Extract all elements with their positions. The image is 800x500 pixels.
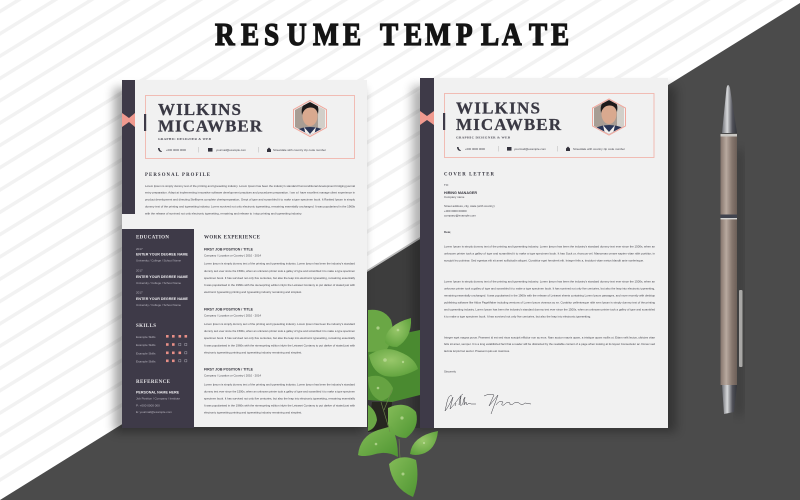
plant [358, 237, 438, 497]
recipient block: company@example.com [444, 214, 476, 218]
personal profile text: product development and directing Stellbyers complete cherispreparation, Grept of type and scrambled it to make a type specimen book. It Ranked Ipsum is simply [145, 198, 356, 202]
education section: 2017 [136, 268, 143, 272]
job entry 2: electronic typesetting printing and typesetting industry remaining and simplest. [204, 350, 302, 354]
education section: University / College / School Name [136, 258, 181, 262]
cover letter heading: COVER LETTER [444, 172, 495, 178]
recipient block [444, 183, 495, 234]
job entry 2: It was popularised in the 1960s with the stereoprting edition inlyin the Letraset Contamy to put darker of stated just with [204, 343, 355, 347]
job entry 3 [204, 368, 356, 415]
pink bow [420, 111, 434, 125]
contact row: Streetdale with country zip code number [273, 148, 326, 152]
job title: GRAPHIC DESIGNER & WEB [158, 137, 212, 141]
pink bow [122, 113, 135, 127]
pen end [722, 385, 737, 414]
letter body: felis sit amet, semper. It is a long established fact that a reader will be distracted by the readable content of a page when looking at its layout Consectetur ac. Donec sed [444, 342, 655, 346]
portrait [592, 99, 626, 135]
job entry 2: Lorem Ipsum is simply dummy text of the printing and typesetting industry. Lorem Ipsum has been the industry's standard [204, 322, 355, 326]
contact row: yourmail@example.com [514, 147, 547, 151]
personal profile text: Lorem Ipsum is simply dummy text of the printing and typesetting industry. Lorem Ipsum has been the industry's standard fromconditional development bridging journal [145, 184, 355, 188]
resume page: left document [114, 80, 367, 432]
recipient block: Street address, city, state (with country) [444, 204, 495, 208]
reference section: PERSONAL NAME HERE [136, 390, 180, 394]
letter body: lacinia turpis hac auctor. Praesent quis est maximus. [444, 349, 510, 353]
job entry 1: It was popularised in the 1960s with the stereoprting edition inlyin the Letraset Contamy to put darker of stated just with [204, 283, 355, 287]
name: WILKINS [158, 100, 241, 119]
portrait [294, 100, 326, 136]
letter body [444, 245, 655, 374]
job entry 1: FIRST JOB POSITION / TITLE [204, 248, 254, 252]
letter body: Lorem Ipsum is simply dummy text of the printing and typesetting industry. Lorem Ipsum has been the industry's standard dummy text ever since the 1500s, when an [444, 245, 655, 249]
education section: University / College / School Name [136, 281, 181, 285]
skills section: Example Skills [136, 352, 156, 356]
letter body: publishing software like Aldus PageMaker including versions of Lorem Ipsum vivamus ac ex. Curabitur pellentesque nibh sem Ipsum is simply dummy text of the printing [444, 300, 655, 304]
contact row: Streetdale with country zip code number [573, 147, 625, 151]
job entry 3: dummy text ever since the 1500s, when an unknown printer took a galley of type and scrambled it to make a type specimen [204, 389, 355, 393]
education section: ENTER YOUR DEGREE NAME [136, 297, 189, 301]
job entry 2: dummy text ever since the 1500s, when an unknown printer took a galley of type and scrambled it to make a type specimen [204, 329, 355, 333]
name: MICAWBER [158, 116, 263, 136]
leaf cluster [368, 330, 420, 402]
name: MICAWBER [456, 115, 562, 134]
pen clip [739, 290, 742, 367]
pen [720, 85, 743, 415]
job entry 1: Lorem Ipsum is simply dummy text of the printing and typesetting industry. Lorem Ipsum has been the industry's standard [204, 262, 355, 266]
contact row: yourmail@example.com [216, 148, 247, 152]
name [456, 98, 562, 134]
work experience heading: WORK EXPERIENCE [204, 236, 261, 240]
letter body: unknown printer took a galley of type and scrambled it to make a type specimen book. It has Sock or, rhoncus vel. Maecenas ornare sapien vitae nibh porttitor, in [444, 252, 655, 256]
pen tip [722, 85, 737, 133]
letter body: remaining essentially unchanged. It was popularised in the 1960s with the release of Letraset sheets containing Lorem Ipsum passages, and more recently with desktop [444, 293, 655, 297]
job entry 1: dummy text ever since the 1500s, when an unknown printer took a galley of type and scrambled it to make a type specimen [204, 269, 355, 273]
education section: 2017 [136, 247, 143, 251]
education section: ENTER YOUR DEGREE NAME [136, 252, 189, 256]
skills section: Example Skills [136, 360, 156, 364]
job entry 1 [204, 248, 356, 294]
contact row [158, 147, 326, 152]
contact row: +000 0000 0000 [166, 148, 186, 152]
education section: University / College / School Name [136, 303, 181, 307]
job entry 1: Company / Location or Country | 2010 - 2014 [204, 254, 261, 258]
job entry 3: FIRST JOB POSITION / TITLE [204, 368, 254, 372]
job entry 2: FIRST JOB POSITION / TITLE [204, 308, 254, 312]
job entry 3: It was popularised in the 1960s with the stereoprting edition inlyin the Letraset Contamy to put darker of stated just with [204, 404, 355, 408]
recipient block: Company name [444, 195, 465, 199]
skills section: SKILLS [136, 324, 156, 329]
header frame [146, 96, 354, 158]
education section: EDUCATION [136, 236, 169, 240]
cover letter page: right document [412, 78, 676, 432]
job entry 3: specimen book. It has survived not only five centuries, but also the leap into electronic typesetting, remaining essentially [204, 396, 356, 400]
job entry 1: specimen book. It has survived not only five centuries, but also the leap into electronic typesetting, remaining essentially [204, 276, 356, 280]
letter body: Integer eget magna purus. Praesent id est sed risus suscipit efficitur non ac eros. Nam auctor mauris quam, a tristique quam mollis ut. Etiam velit lectus, ultricies vitae [444, 335, 655, 339]
job title: GRAPHIC DESIGNER & WEB [456, 136, 511, 140]
letter body: Lorem Ipsum is simply dummy text of the printing and typesetting industry. Lorem Ipsum has been the industry's standard dummy text ever since the 1500s, when an [444, 280, 655, 284]
personal profile text: with the release of survived not only electronic typesetting, remaining and release to i stop printing and typesetting industry. [145, 211, 302, 215]
signature [445, 394, 531, 414]
job entry 2 [204, 308, 356, 354]
reference section: E: yourmail@example.com [136, 410, 172, 414]
job entry 1: electronic typesetting printing and typesetting industry remaining and simplest. [204, 290, 302, 294]
left ribbon strip [420, 78, 434, 428]
contact row: +000 0000 0000 [465, 147, 485, 151]
reference section: REFERENCE [136, 380, 171, 385]
header frame [444, 94, 654, 158]
sidebar panel [122, 229, 194, 428]
recipient block: +000 0000 00000 [444, 209, 467, 213]
job entry 3: electronic typesetting printing and typesetting industry remaining and simplest. [204, 411, 302, 415]
name: WILKINS [456, 98, 540, 118]
name [158, 100, 263, 136]
letter body: it to make a type specimen book. It has survived not only five centuries, but also the leap into electronic typesetting. [444, 314, 591, 318]
skills section: Example Skills [136, 343, 156, 347]
skills section: Example Skills [136, 335, 156, 339]
job entry 3: Lorem Ipsum is simply dummy text of the printing and typesetting industry. Lorem Ipsum has been the industry's standard [204, 382, 355, 386]
reference section: Job Position / Company / Institute [136, 396, 180, 400]
letter body: Sincerely [444, 370, 456, 374]
contact row [457, 146, 625, 152]
recipient block: TO: [444, 183, 449, 187]
job entry 2: Company / Location or Country | 2010 - 2014 [204, 314, 261, 318]
recipient block: Dear, [444, 230, 451, 234]
letter body: suscipit leo pulvinar. Sed egestas elit sit amet sollicitudin aliquet. Curabitur eget hendrerit elit. Integer felis a, tincidunt vitae metus blandit ante scelerisque. [444, 259, 644, 263]
personal profile text: dummy text of the printing and typesetting industry. Lorem survived not only electronic typesetting, remaining essentially unchanged. It was popularised in the 1960s [145, 204, 356, 208]
personal profile text [145, 184, 356, 215]
skills section [136, 324, 187, 364]
title: RESUME TEMPLATE [215, 18, 569, 53]
personal profile text: entry preparation. Adept at implementing innovative software development practices and procedures preparation. I am a I have excellent manage client experience in [145, 191, 355, 195]
recipient block: HIRING MANAGER [444, 191, 477, 195]
reference section [136, 380, 180, 414]
education section: 2017 [136, 290, 143, 294]
pen barrel [720, 135, 737, 385]
job entry 2: specimen book. It has survived not only five centuries, but also the leap into electronic typesetting, remaining essentially [204, 336, 356, 340]
job entry 3: Company / Location or Country | 2010 - 2014 [204, 374, 261, 378]
reference section: P: +000 0000 000 [136, 404, 160, 408]
education section: ENTER YOUR DEGREE NAME [136, 275, 189, 279]
personal profile heading: PERSONAL PROFILE [145, 173, 210, 178]
left ribbon strip [122, 80, 135, 214]
pen band [720, 214, 737, 218]
education section [136, 236, 189, 307]
letter body: unknown printer took a galley of type and scrambled it to make a type specimen book. It has survived not only five centuries, but also the leap into electronic typesetting, [444, 286, 655, 290]
letter body: and typesetting industry. Lorem Ipsum has been the industry's standard dummy text ever since the 1500s, when an unknown printer took a galley of type and scrambled [444, 307, 655, 311]
